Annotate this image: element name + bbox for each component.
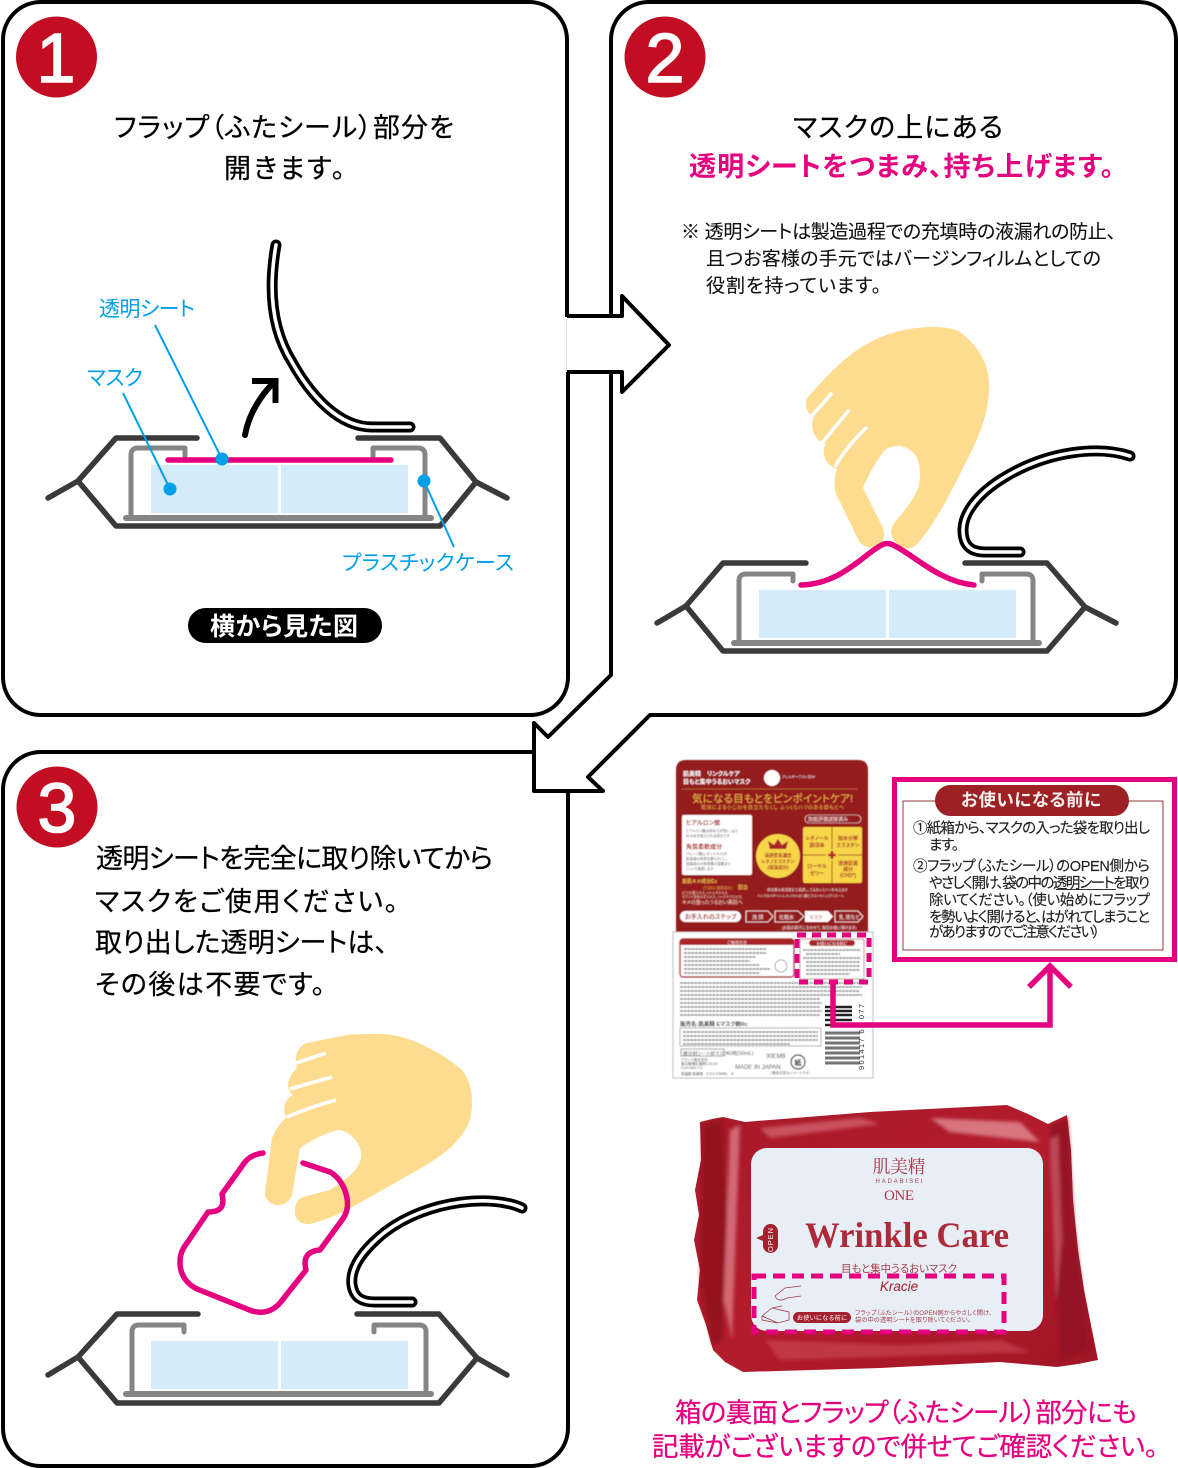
arrow: step 1 to step 2 bbox=[566, 296, 669, 392]
box lower white panel: 0120-540-712 bbox=[681, 1066, 703, 1070]
panel: step 3 remove sheet bbox=[3, 752, 568, 1466]
note: purpose of sheet bbox=[681, 221, 1116, 297]
note: purpose of sheet: 役割を持っています。 bbox=[706, 275, 881, 297]
box upper red panel: エラスチン bbox=[836, 843, 860, 849]
box upper red panel: 目もと集中うるおいマスク bbox=[683, 778, 751, 786]
flap bbox=[352, 1201, 522, 1302]
transparent sheet bbox=[168, 457, 391, 463]
brand: hadabisei: ONE bbox=[884, 1188, 914, 1204]
caption: also printed on box and flap: 記載がございますので併せてご確認ください。 bbox=[652, 1432, 1158, 1462]
brand: hadabisei: 肌美精 bbox=[872, 1157, 926, 1177]
heading: step 2 bbox=[689, 113, 1114, 182]
barcode: 901417 61 077 bbox=[857, 1004, 866, 1070]
box lower white panel: 高濃度 肌美精 Eマスク2WRc B bbox=[681, 1071, 734, 1076]
box lower white panel: 屋分封シート状マスク bbox=[683, 1050, 729, 1057]
box upper red panel: 乾燥による小じわを目立たなくし ふっくらハリのある目もとへ bbox=[701, 804, 844, 811]
box upper red panel: 肌表面の角質を柔らかくし、 bbox=[686, 856, 727, 861]
box upper red panel: レチノエラスチン bbox=[761, 859, 795, 865]
heading: step 3: マスクをご使用ください。 bbox=[95, 887, 398, 917]
box upper red panel: 気になる目もとをピンポイントケア! bbox=[692, 792, 853, 805]
box upper red panel: ヒアルロン酸 bbox=[686, 819, 720, 827]
brand: hadabisei: HADABISEI bbox=[876, 1179, 923, 1185]
box upper red panel: レチノール bbox=[805, 836, 829, 842]
box upper red panel: 乳 液など bbox=[839, 914, 860, 921]
badge: number 3 bbox=[16, 766, 98, 848]
callout instructions: を勢いよく開けると、はがれてしまうこと bbox=[929, 909, 1150, 926]
callout instructions: 除いてください。（使い始めにフラップ bbox=[929, 892, 1151, 909]
box lower white panel: □商品写真はイメージです。 bbox=[770, 1070, 811, 1075]
arrow: lift direction bbox=[245, 381, 276, 435]
label: side view pill bbox=[188, 608, 382, 643]
panel 3 outline bbox=[3, 752, 568, 1466]
box upper red panel: 配合 bbox=[738, 884, 748, 891]
note: purpose of sheet: 且つお客様の手元ではバージンフィルムとしての bbox=[706, 248, 1101, 270]
mask stack bbox=[151, 1341, 408, 1389]
diagram: side view with lifted flap bbox=[48, 245, 514, 575]
callout: plastic case: プラスチックケース bbox=[342, 552, 514, 575]
callout instructions bbox=[913, 820, 1151, 941]
icon: hand bbox=[265, 1034, 472, 1224]
box upper red panel: 6Lの水を抱えられる成分です bbox=[686, 833, 730, 838]
box upper red panel: 浸透促進 bbox=[838, 860, 858, 867]
brand: hadabisei bbox=[872, 1157, 926, 1204]
box upper red panel bbox=[676, 760, 868, 932]
box upper red panel: 成分 bbox=[843, 866, 853, 873]
box lower white panel: ご使用方法 bbox=[727, 939, 747, 945]
box upper red panel: ゼリー bbox=[810, 870, 824, 877]
box upper red panel: (ビワの葉エキス、ハトムギエキス、 bbox=[682, 890, 729, 895]
box upper red panel: 角質柔軟成分 bbox=[686, 843, 722, 851]
box upper red panel: 効能評価試験済み bbox=[808, 816, 848, 823]
box upper red panel: ローヤル bbox=[807, 864, 827, 870]
heading: step 1 bbox=[114, 113, 454, 184]
plastic case bbox=[131, 448, 425, 516]
box lower white panel: 東京都港区海岸3-20-20 bbox=[681, 1061, 718, 1066]
small note: 袋の中の透明シートを取り除いてください。 bbox=[855, 1316, 971, 1324]
callout instructions: ②フラップ（ふたシール）のOPEN側から bbox=[913, 858, 1150, 875]
callout instructions: がありますのでご注意ください） bbox=[929, 924, 1100, 941]
badge: number 2: 2 bbox=[646, 19, 684, 97]
callout: transparent sheet: 透明シート bbox=[99, 298, 195, 321]
photo: product box back bbox=[673, 760, 873, 1078]
flap bbox=[963, 451, 1130, 552]
box upper red panel: 誘導体 bbox=[809, 842, 825, 849]
outer bag bbox=[657, 563, 1116, 651]
callout: mask bbox=[87, 367, 176, 496]
small hand and box illustration bbox=[762, 1286, 801, 1323]
callout heading pill: お使いになる前に bbox=[961, 790, 1101, 810]
panel: step 1 open flap bbox=[3, 2, 568, 715]
note: purpose of sheet: ※ 透明シートは製造過程での充填時の液漏れの防止、 bbox=[681, 221, 1116, 243]
small before use pill: お使いになる前に bbox=[797, 1314, 847, 1322]
callout: transparent sheet bbox=[99, 298, 228, 466]
box upper red panel: キメの整ったうるおい美肌へ bbox=[682, 899, 743, 906]
box lower white panel: 60枚(50mL) bbox=[727, 1050, 754, 1057]
diagram: hand removing sheet bbox=[48, 1034, 522, 1403]
box upper red panel: じっくり浸透します bbox=[686, 866, 714, 871]
barcode bbox=[825, 1004, 866, 1070]
transparent sheet removed bbox=[180, 1153, 347, 1312]
callout: before use enlarged bbox=[894, 780, 1174, 960]
plastic case bbox=[132, 1325, 426, 1391]
caption: also printed on box and flap bbox=[652, 1398, 1158, 1462]
callout heading pill bbox=[935, 785, 1129, 816]
heading: step 3: 透明シートを完全に取り除いてから bbox=[96, 844, 493, 874]
callout instructions: やさしく開け、袋の中の透明シートを取り bbox=[929, 875, 1150, 892]
badge: number 1: 1 bbox=[37, 19, 75, 97]
panel 1 outline bbox=[3, 2, 568, 715]
box lower white panel: 紙 bbox=[794, 1058, 802, 1067]
mask stack bbox=[151, 465, 408, 513]
box upper red panel: (CHD*) bbox=[840, 873, 856, 879]
small note bbox=[855, 1309, 992, 1324]
box upper red panel: ※レクロペチリン-1、4-ジカルボン酸ビスエトキシジグリコール bbox=[757, 893, 845, 898]
callout: mask: マスク bbox=[87, 367, 143, 390]
heading: step 1: 開きます。 bbox=[224, 154, 345, 184]
box lower white panel: 30EMB bbox=[766, 1054, 786, 1060]
box lower white panel: MADE IN JAPAN bbox=[735, 1065, 781, 1071]
highlight: dashed callout area on box bbox=[797, 935, 869, 982]
heading: step 3 bbox=[95, 844, 493, 1000]
case base bbox=[734, 640, 1039, 646]
product name: Wrinkle Care bbox=[805, 1215, 1009, 1255]
box lower white panel: お使いになる前に bbox=[817, 940, 848, 946]
pouch body bbox=[694, 1105, 1098, 1372]
box upper red panel: (お肌の調子に合わせて、毎日お使い頂けます) bbox=[782, 925, 857, 930]
highlight: dashed callout area on pouch bbox=[754, 1276, 1004, 1332]
box upper red panel: お手入れのステップ bbox=[685, 913, 737, 921]
box upper red panel: フルーツ酸(レモンエキス)が bbox=[686, 851, 728, 856]
pouch label bbox=[751, 1148, 1043, 1331]
transparent sheet bbox=[801, 544, 974, 585]
plastic case bbox=[739, 574, 1033, 640]
box upper red panel: 肌美精 リンクルケア bbox=[683, 770, 740, 778]
label: side view pill: 横から見た図 bbox=[210, 613, 358, 641]
outer bag bbox=[48, 438, 507, 526]
open tab mark: OPEN bbox=[766, 1228, 775, 1252]
case base bbox=[126, 515, 431, 521]
box lower white panel: 販売名:肌美精 Eマスク朝Rc bbox=[680, 1020, 748, 1028]
panel 2 outline with down-left arrow bbox=[534, 2, 1176, 791]
small note: フラップ（ふたシール）のOPEN側からやさしく開け、 bbox=[855, 1309, 992, 1317]
badge: number 1 bbox=[16, 16, 97, 98]
heading: step 2: 透明シートをつまみ、持ち上げます。 bbox=[689, 152, 1114, 182]
heading: step 3: その後は不要です。 bbox=[95, 970, 325, 1000]
heading: step 1: フラップ（ふたシール）部分を bbox=[114, 113, 454, 143]
box lower white panel: クラシエ株式会社 bbox=[681, 1057, 708, 1062]
box upper red panel: アレルギーテスト済み* bbox=[782, 774, 816, 779]
box upper red panel: 角質層の奥深層まで浸透し、うるおいとハリを与えます bbox=[767, 887, 848, 892]
case base bbox=[126, 1391, 431, 1397]
heading: step 3: 取り出した透明シートは、 bbox=[95, 928, 388, 958]
outer bag bbox=[48, 1314, 507, 1403]
badge: number 3: 3 bbox=[38, 769, 76, 847]
box upper red panel: 加水分解 bbox=[838, 835, 858, 842]
box lower white panel bbox=[673, 932, 873, 1078]
box upper red panel: マスク bbox=[809, 915, 823, 921]
box upper red panel: (保湿成分) bbox=[768, 864, 789, 871]
callout instructions: ます。 bbox=[929, 837, 959, 854]
box upper red panel: 保湿成分が角質層の深層まで bbox=[686, 861, 731, 866]
badge: number 2 bbox=[624, 16, 706, 98]
product subtitle: 目もと集中うるおいマスク bbox=[841, 1262, 957, 1275]
caption: also printed on box and flap: 箱の裏面とフラップ（ふたシール）部分にも bbox=[675, 1398, 1137, 1428]
box upper red panel: ヒアルロン酸は保水力が高く、1gで bbox=[686, 828, 739, 833]
connector arrow: box to enlarged callout bbox=[833, 966, 1071, 1025]
callout: plastic case bbox=[342, 474, 514, 575]
Kracie logo: Kracie bbox=[880, 1279, 918, 1294]
callout instructions: ①紙箱から、マスクの入った袋を取り出し bbox=[913, 820, 1151, 837]
panel: step 2 lift sheet bbox=[534, 2, 1176, 791]
box upper red panel: 洗 顔 bbox=[752, 914, 763, 921]
mask stack bbox=[759, 590, 1016, 638]
box upper red panel: (うるおい整肌成分): bbox=[703, 885, 733, 890]
box upper red panel: セラミド含有ゆずエキス、シャクヤクエキス) bbox=[682, 894, 742, 899]
heading: step 2: マスクの上にある bbox=[793, 113, 1003, 143]
flap bbox=[272, 245, 410, 427]
icon: hand bbox=[806, 327, 989, 548]
box upper red panel: 美肌キメ成分Ex bbox=[682, 878, 717, 885]
box upper red panel: 浸透型高濃度 bbox=[764, 852, 792, 859]
photo: mask pouch bbox=[694, 1105, 1098, 1372]
diagram: hand lifting sheet bbox=[657, 327, 1130, 651]
open tab mark bbox=[756, 1224, 778, 1253]
small before use pill bbox=[793, 1312, 851, 1323]
box upper red panel: 化粧水 bbox=[779, 914, 794, 921]
